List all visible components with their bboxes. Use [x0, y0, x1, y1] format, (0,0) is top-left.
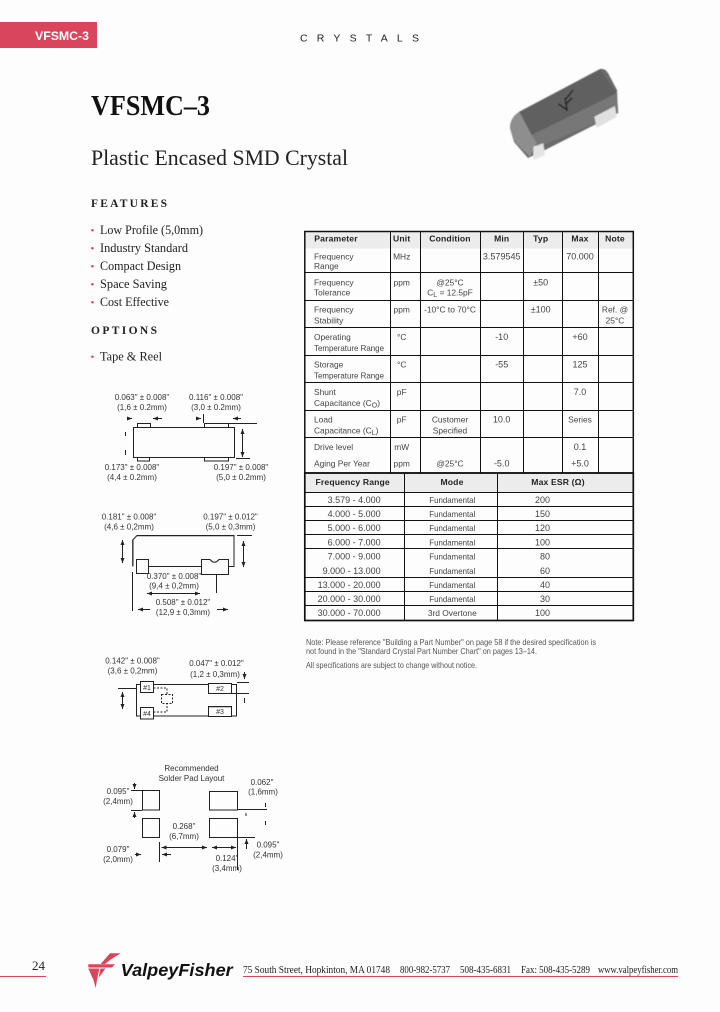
parameter values: ±50	[533, 278, 548, 288]
heading: features: FEATURES	[91, 198, 167, 210]
mode rows: Fundamental	[429, 495, 475, 505]
options list	[90, 325, 163, 364]
frequency table header: Frequency Range	[316, 477, 390, 487]
footer contact details	[243, 965, 678, 976]
frequency table header	[316, 477, 585, 487]
diagram: recommended solder pad layout: 0.268"	[173, 822, 196, 831]
feature items: •	[90, 225, 94, 237]
parameter values: mW	[394, 442, 409, 452]
frequency rows: 7.000 - 9.000	[328, 552, 381, 562]
parameter values: = 12.5pF	[437, 288, 473, 298]
diagram: top view dimensions: (1,6 ± 0.2mm)	[117, 403, 167, 412]
diagram: pin layout: (3,6 ± 0,2mm)	[108, 666, 158, 676]
parameter values: 0.1	[574, 442, 586, 452]
parameter names: Temperature Range	[314, 370, 384, 380]
parameter values: Customer	[432, 415, 468, 425]
parameter values: MHz	[393, 251, 410, 261]
parameter values: ppm	[394, 459, 410, 469]
diagram: pin layout	[105, 656, 249, 719]
diagram: side view dimensions: 0.197" ± 0.012"	[203, 512, 258, 522]
frequency rows: 6.000 - 7.000	[328, 538, 381, 548]
parameter values: @25°C	[436, 459, 464, 469]
diagram: recommended solder pad layout: Recommended	[164, 764, 219, 773]
frequency table header: Mode	[440, 477, 464, 487]
footer contact details: Fax: 508-435-5289	[521, 965, 590, 976]
tab: product code: VFSMC-3	[35, 29, 89, 43]
diagram: pin layout: #3	[216, 709, 224, 716]
parameter values	[393, 251, 628, 469]
mode rows: Fundamental	[429, 552, 475, 562]
diagram: pin layout: (1,2 ± 0,3mm)	[190, 670, 240, 679]
parameter names: Range	[314, 261, 339, 271]
note text: not found in the "Standard Crystal Part Number Chart" on pages 13–14.	[306, 647, 537, 656]
diagram: recommended solder pad layout: (3,4mm)	[212, 864, 242, 873]
feature items: Cost Effective	[100, 295, 169, 309]
ESR rows: 100	[535, 538, 550, 548]
feature items: •	[90, 243, 94, 255]
diagram: top view dimensions: (3,0 ± 0.2mm)	[191, 403, 241, 412]
ESR rows: 80	[540, 552, 550, 562]
diagram: recommended solder pad layout: (1,6mm)	[248, 788, 278, 796]
ESR rows: 200	[535, 495, 550, 505]
table header row: Condition	[429, 234, 471, 244]
parameter names: )	[377, 398, 380, 408]
parameter names: Drive level	[314, 442, 353, 452]
feature items: Compact Design	[100, 259, 182, 273]
footer contact details: 508-435-6831	[460, 965, 511, 976]
ESR rows	[535, 495, 550, 618]
subtitle: Plastic Encased SMD Crystal	[91, 145, 348, 170]
diagram: pin layout: 0.142" ± 0.008"	[105, 656, 160, 666]
parameter names: Capacitance (C	[314, 425, 372, 435]
diagram: side view dimensions: 0.181" ± 0.008"	[102, 512, 156, 522]
diagram: side view dimensions: 0.370" ± 0.008"	[147, 572, 201, 581]
frequency rows	[318, 495, 381, 618]
table: frequency range and ESR	[305, 473, 633, 620]
option item: Tape & Reel	[100, 350, 163, 364]
diagram: pin layout: #1	[143, 685, 151, 692]
parameter names: Capacitance (C	[314, 398, 372, 408]
logo: Valpey Fisher	[88, 953, 234, 988]
mode rows: Fundamental	[429, 538, 475, 548]
mode rows: Fundamental	[429, 509, 475, 519]
feature items: •	[90, 297, 94, 309]
diagram: recommended solder pad layout	[103, 764, 283, 873]
diagram: recommended solder pad layout: 0.079"	[107, 845, 130, 854]
diagram: pin layout: #2	[216, 686, 224, 693]
parameter names: Frequency	[314, 304, 354, 314]
mode rows: Fundamental	[429, 594, 475, 604]
parameter values: ±100	[531, 304, 551, 314]
mode rows	[428, 495, 477, 618]
parameter values: L	[433, 292, 437, 299]
ESR rows: 120	[535, 523, 550, 533]
table header row: Max	[571, 234, 589, 244]
features list	[90, 198, 203, 309]
diagram: side view dimensions: 0.508" ± 0.012"	[156, 598, 210, 607]
frequency rows: 30.000 - 70.000	[318, 608, 381, 618]
diagram: side view dimensions	[102, 512, 258, 617]
photo: crystal component	[510, 69, 618, 160]
parameter values: @25°C	[436, 278, 464, 288]
parameter values: -10	[495, 332, 508, 342]
frequency rows: 13.000 - 20.000	[318, 580, 381, 590]
parameter values: °C	[397, 332, 406, 342]
parameter values: +5.0	[571, 459, 589, 469]
diagram: recommended solder pad layout: (2,4mm)	[103, 797, 133, 806]
frequency rows: 5.000 - 6.000	[328, 523, 381, 533]
ESR rows: 60	[540, 566, 550, 576]
diagram: recommended solder pad layout: 0.095"	[257, 840, 280, 850]
parameter values: +60	[572, 332, 588, 342]
diagram: recommended solder pad layout: 0.095"	[107, 787, 130, 796]
feature items: •	[90, 261, 94, 273]
parameter names: Load	[314, 415, 333, 425]
diagram: recommended solder pad layout: (2,0mm)	[103, 855, 133, 864]
parameter values: pF	[397, 387, 407, 397]
parameter names: Stability	[314, 315, 344, 325]
diagram: side view dimensions: (9,4 ± 0,2mm)	[149, 582, 199, 590]
diagram: top view dimensions: 0.173" ± 0.008"	[105, 463, 159, 472]
note text: Note: Please reference "Building a Part Number" on page 58 if the desired specification is	[306, 638, 596, 647]
frequency table header: Max ESR (Ω)	[531, 477, 585, 487]
diagram: recommended solder pad layout: (6,7mm)	[169, 832, 199, 841]
ESR rows: 100	[535, 608, 550, 618]
diagram: side view dimensions: (4,6 ± 0,2mm)	[104, 522, 154, 532]
diagram: pin layout: 0.047" ± 0.012"	[189, 659, 244, 668]
note text	[306, 638, 596, 670]
feature items: Space Saving	[100, 277, 168, 291]
diagram: recommended solder pad layout: 0.062"	[251, 778, 274, 787]
footer contact details: 800-982-5737	[400, 965, 450, 976]
mode rows: 3rd Overtone	[428, 608, 477, 618]
parameter names: Storage	[314, 360, 344, 370]
table header row	[314, 234, 625, 244]
table: parameters	[305, 232, 633, 473]
diagram: side view dimensions: (12,9 ± 0,3mm)	[156, 608, 210, 617]
parameter values: -5.0	[494, 459, 509, 469]
parameter values: -10°C to 70°C	[424, 304, 476, 314]
parameter values: pF	[397, 415, 407, 425]
table header row: Typ	[533, 234, 548, 244]
feature items: Low Profile (5,0mm)	[100, 223, 203, 237]
feature items	[90, 223, 203, 309]
parameter values: 10.0	[493, 415, 510, 425]
parameter names: )	[376, 425, 379, 435]
parameter values: Series	[568, 415, 592, 425]
diagram: top view dimensions: 0.197" ± 0.008"	[214, 463, 268, 472]
mode rows: Fundamental	[429, 580, 475, 590]
parameter names: Aging Per Year	[314, 459, 370, 469]
parameter names: L	[372, 430, 376, 437]
frequency rows: 9.000 - 13.000	[323, 566, 381, 576]
parameter values: ppm	[394, 304, 410, 314]
feature items: •	[90, 279, 94, 291]
option item: •	[90, 352, 94, 364]
parameter values: C	[427, 288, 433, 298]
table header row: Unit	[393, 234, 410, 244]
ESR rows: 150	[535, 509, 550, 519]
parameter values: 7.0	[574, 387, 586, 397]
page number: 24	[32, 958, 46, 973]
parameter names: Temperature Range	[314, 343, 384, 353]
page number	[0, 958, 46, 976]
parameter values: Specified	[433, 425, 468, 435]
diagram: top view dimensions: 0.116" ± 0.008"	[189, 393, 243, 402]
parameter values: -55	[495, 360, 508, 370]
title: VFSMC–3	[91, 90, 210, 122]
mode rows: Fundamental	[429, 566, 475, 576]
parameter names	[314, 251, 384, 469]
parameter values: 70.000	[566, 251, 594, 261]
diagram: top view dimensions: (4,4 ± 0.2mm)	[107, 473, 157, 482]
tab: product code	[0, 22, 97, 48]
ESR rows: 40	[540, 580, 550, 590]
table header row: Note	[605, 234, 625, 244]
diagram: recommended solder pad layout: Solder Pad Layout	[159, 774, 225, 783]
diagram: recommended solder pad layout: (2,4mm)	[253, 850, 283, 860]
parameter names: O	[372, 402, 378, 410]
frequency rows: 3.579 - 4.000	[328, 495, 381, 505]
parameter names: Operating	[314, 332, 351, 342]
section label: crystals: CRYSTALS	[300, 32, 419, 44]
parameter values: 3.579545	[483, 251, 520, 261]
diagram: top view dimensions: 0.063" ± 0.008"	[115, 393, 169, 402]
table header row: Min	[494, 234, 509, 244]
frequency rows: 4.000 - 5.000	[328, 509, 381, 519]
parameter values: 125	[572, 360, 588, 370]
parameter values: Ref. @	[602, 304, 628, 314]
parameter names: Frequency	[314, 278, 354, 288]
parameter names: Frequency	[314, 251, 354, 261]
diagram: pin layout: #4	[143, 711, 151, 718]
parameter names: Shunt	[314, 387, 337, 397]
note text: All specifications are subject to change without notice.	[306, 661, 477, 670]
diagram: side view dimensions: (5,0 ± 0,3mm)	[206, 522, 256, 532]
table header row: Parameter	[314, 234, 358, 244]
ESR rows: 30	[540, 594, 550, 604]
mode rows: Fundamental	[429, 523, 475, 533]
logo: Valpey Fisher: ValpeyFisher	[121, 960, 234, 980]
parameter names: Tolerance	[314, 288, 351, 298]
footer contact details: 75 South Street, Hopkinton, MA 01748	[243, 965, 390, 976]
parameter values: °C	[397, 360, 406, 370]
diagram: top view dimensions	[105, 393, 268, 482]
heading: options: OPTIONS	[91, 325, 157, 337]
diagram: recommended solder pad layout: 0.124"	[216, 854, 239, 863]
frequency rows: 20.000 - 30.000	[318, 594, 381, 604]
diagram: top view dimensions: (5,0 ± 0.2mm)	[216, 473, 266, 482]
parameter values: ppm	[394, 278, 410, 288]
parameter values: 25°C	[606, 315, 624, 325]
footer contact details: www.valpeyfisher.com	[598, 965, 678, 976]
feature items: Industry Standard	[100, 241, 189, 255]
